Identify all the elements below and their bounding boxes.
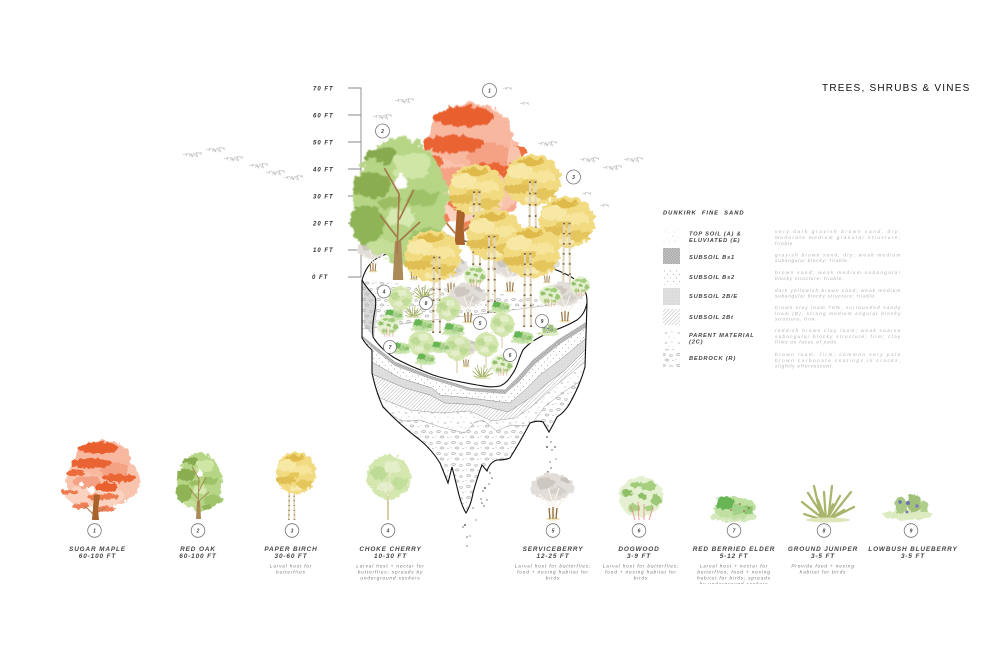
tree: paper birch front left <box>403 231 461 333</box>
legend row: bedrock: brown loam; firm; common very pale <box>775 352 901 357</box>
small back shrubs <box>358 239 560 293</box>
number markers on island: 1 <box>488 88 491 94</box>
species: dogwood: Larval host for butterflies; <box>603 564 679 568</box>
number markers on island: 4 <box>382 290 386 296</box>
legend row: bedrock: BEDROCK (R) <box>689 356 736 362</box>
number markers on island: 9 <box>541 319 544 325</box>
species: red berried elder: RED BERRIED ELDER <box>693 546 775 553</box>
tree: paper birch right <box>537 197 595 295</box>
understory plants on island <box>377 266 590 379</box>
legend row: parent material: reddish brown clay loam; weak coarse <box>775 328 901 333</box>
legend row: bedrock: brown carbonate coatings in cracks; <box>775 358 901 363</box>
legend row: subsoil 2Bt <box>663 305 901 325</box>
layer: subsoil Bs2 <box>364 328 586 404</box>
tall tree group on island <box>351 103 595 333</box>
legend row: subsoil 2B/E: subangular blocky structure; friable. <box>775 294 877 298</box>
tree: paper birch middle <box>465 210 523 313</box>
species: paper birch: Larval host for <box>270 564 312 568</box>
species: dogwood: 3-9 FT <box>627 553 651 560</box>
number markers on island <box>376 84 580 362</box>
legend row: top soil <box>663 228 901 246</box>
height scale: 20 FT <box>312 222 334 228</box>
species: dogwood: food + nesing habitat for <box>605 570 677 574</box>
number markers on island: 5 <box>479 321 482 327</box>
island outline <box>362 280 587 513</box>
number markers on island: 6 <box>509 353 512 359</box>
species: red berried elder: habitat for birds; spreads <box>697 576 771 580</box>
species: serviceberry: birds <box>546 576 560 580</box>
tree: sugar maple <box>406 103 527 245</box>
legend row: bedrock <box>663 349 901 369</box>
species: lowbush blueberry: 9 <box>910 528 913 534</box>
species: paper birch: 3 <box>291 528 294 534</box>
title: TREES, SHRUBS & VINES <box>822 83 971 94</box>
flying birds <box>183 87 643 207</box>
species: red berried elder: Larval host + nectar for <box>700 564 768 568</box>
number markers on island: 8 <box>425 301 428 307</box>
species: dogwood: 6 <box>638 528 641 534</box>
species: serviceberry: food + nesing habitat for <box>517 570 589 574</box>
species: red oak: RED OAK <box>180 546 216 553</box>
species: choke cherry <box>356 455 425 580</box>
layer: subsoil 2B/E <box>372 339 586 412</box>
species: red oak: 2 <box>196 528 200 534</box>
legend row: top soil: ELUVIATED (E) <box>689 238 740 244</box>
species: ground juniper <box>788 486 858 574</box>
legend row: parent material: films on faces of peds. <box>775 340 839 345</box>
species: ground juniper: 3-5 FT <box>811 553 835 560</box>
legend row: subsoil Bs2 <box>663 268 901 285</box>
species: sugar maple: 60-100 FT <box>79 553 116 560</box>
height scale <box>312 86 361 281</box>
legend row: subsoil 2Bt: brown clay loam 70%, surrounded sandy <box>775 305 901 310</box>
species: lowbush blueberry: 3-5 FT <box>901 553 925 560</box>
legend row: top soil: friable <box>775 241 793 246</box>
legend row: parent material: PARENT MATERIAL <box>689 333 754 339</box>
species: paper birch <box>264 452 318 574</box>
height scale: 60 FT <box>313 114 334 120</box>
legend row: subsoil 2B/E: SUBSOIL 2B/E <box>689 294 738 300</box>
species: paper birch: 30-60 FT <box>275 553 308 560</box>
height scale: 40 FT <box>312 168 334 174</box>
tree: red oak <box>351 138 450 280</box>
legend row: subsoil 2Bt: structure; firm. <box>775 316 817 322</box>
legend row: parent material: (2C) <box>689 340 703 346</box>
legend row: parent material: subangular blocky structure; firm; clay <box>775 334 901 339</box>
legend row: subsoil Bs1: SUBSOIL Bs1 <box>689 255 735 261</box>
species: dogwood <box>603 477 679 580</box>
species: lowbush blueberry <box>868 494 958 560</box>
soil strata <box>362 280 587 510</box>
species: serviceberry: 5 <box>552 528 555 534</box>
species: choke cherry: CHOKE CHERRY <box>359 546 422 553</box>
tree: paper birch front right <box>502 227 560 327</box>
species: sugar maple: SUGAR MAPLE <box>69 546 126 553</box>
number markers on island: 7 <box>389 345 392 351</box>
legend row: bedrock: slightly effervescent. <box>775 364 834 369</box>
legend row: subsoil Bs1 <box>663 248 901 264</box>
species: choke cherry: 4 <box>386 528 390 534</box>
tree: paper birch back left <box>447 165 505 277</box>
legend row: subsoil Bs2: blocky structure; friable. <box>775 276 844 281</box>
layer: subsoil 2Bt <box>374 352 585 422</box>
island surface back edge <box>362 240 587 387</box>
species: serviceberry <box>515 473 591 580</box>
height scale: 0 FT <box>312 275 329 281</box>
species: red berried elder: butterflies; food + nesing <box>697 570 771 574</box>
legend row: top soil: very dark grayish brown sand, dry; <box>775 229 901 234</box>
layer: parent material <box>380 365 584 434</box>
legend row: subsoil 2B/E: dark yellowish brown sand; weak medium <box>775 288 901 293</box>
species: serviceberry: Larval host for butterflies; <box>515 564 591 568</box>
species: red berried elder: by underground suckers <box>700 582 768 586</box>
species: dogwood: DOGWOOD <box>618 546 660 553</box>
legend row: subsoil 2B/E <box>663 288 901 305</box>
height scale: 50 FT <box>313 140 334 146</box>
layer: top soil <box>355 300 590 390</box>
species: lowbush blueberry: LOWBUSH BLUEBERRY <box>868 546 958 553</box>
legend: Dunkirk fine sand <box>663 210 901 369</box>
soil island <box>355 240 595 520</box>
falling rocks <box>462 436 557 547</box>
legend row: subsoil Bs2: brown sand; weak medium subangular <box>775 270 901 275</box>
layer: subsoil Bs1 <box>355 300 590 394</box>
species: sugar maple: 1 <box>93 528 96 534</box>
species: red oak <box>176 453 223 560</box>
species: choke cherry: 10-30 FT <box>374 553 407 560</box>
species: choke cherry: underground suckers <box>360 576 421 580</box>
tree: paper birch back right <box>503 155 561 262</box>
species: serviceberry: SERVICEBERRY <box>523 546 583 553</box>
species: ground juniper: 8 <box>823 528 826 534</box>
species: ground juniper: Provide food + nesing <box>791 564 855 568</box>
species: paper birch: PAPER BIRCH <box>264 546 318 553</box>
legend heading: DUNKIRK FINE SAND <box>663 210 745 216</box>
species: sugar maple <box>60 440 140 560</box>
species: red berried elder: 5-12 FT <box>720 553 748 560</box>
legend row: subsoil Bs1: grayish brown sand; dry; weak medium <box>775 252 901 258</box>
species: dogwood: birds <box>634 576 648 580</box>
legend row: parent material <box>663 328 901 347</box>
height scale: 30 FT <box>313 194 334 200</box>
species: choke cherry: Larval host + nectar for <box>356 564 425 568</box>
species: red berried elder <box>693 496 775 586</box>
species: serviceberry: 12-25 FT <box>537 553 570 560</box>
species: red berried elder: 7 <box>733 528 736 534</box>
legend row: top soil: TOP SOIL (A) & <box>689 232 742 238</box>
height scale: 70 FT <box>313 86 334 92</box>
legend row: subsoil Bs2: SUBSOIL Bs2 <box>689 275 735 281</box>
front edge of surface <box>362 280 587 387</box>
legend row: subsoil 2Bt: loam (B), strong medium angular blocky <box>775 311 901 316</box>
legend row: top soil: moderate medium granular structure; <box>775 235 901 240</box>
species: paper birch: butterflies <box>276 570 306 574</box>
legend row: subsoil Bs1: subangular blocky; friable. <box>775 258 850 263</box>
species: choke cherry: butterflies; spreads by <box>358 570 423 574</box>
height scale: 10 FT <box>313 248 334 254</box>
number markers on island: 2 <box>380 129 384 135</box>
species: red oak: 60-100 FT <box>179 553 217 560</box>
species: ground juniper: GROUND JUNIPER <box>788 546 858 553</box>
number markers on island: 3 <box>572 175 575 181</box>
species: ground juniper: habitat for birds <box>800 570 846 574</box>
legend row: subsoil 2Bt: SUBSOIL 2Bt <box>689 315 734 321</box>
